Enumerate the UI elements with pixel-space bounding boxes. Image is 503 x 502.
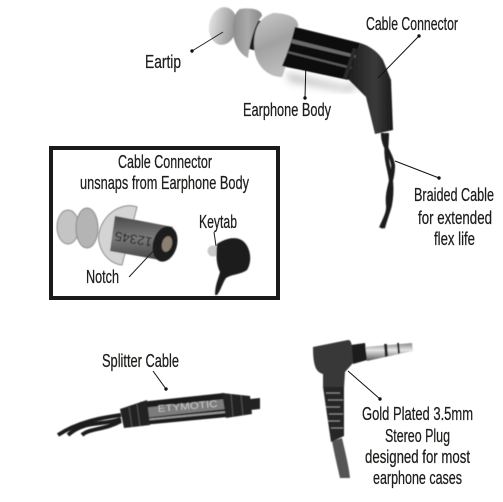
earphone body (282, 27, 360, 80)
leader: eartip (190, 32, 223, 53)
splitter logo: ETYMOTIC (157, 399, 218, 415)
leader: cable connector (378, 34, 421, 78)
eartip and body drawing (57, 206, 181, 265)
label: Eartip: Eartip (145, 51, 181, 72)
panel: cable connector inset (51, 148, 278, 298)
label: gold plated plug: earphone cases (373, 467, 462, 488)
label: Keytab: Keytab (199, 211, 237, 232)
serial number: 12345 (113, 228, 154, 250)
splitter body (140, 393, 227, 425)
leader: earphone body (303, 60, 307, 100)
leader: notch (129, 247, 157, 277)
plug head (313, 340, 353, 388)
label: Cable Connector: Cable Connector (366, 13, 458, 34)
eartip (206, 5, 298, 77)
collar (351, 343, 367, 364)
leader: splitter (153, 371, 168, 391)
leader: braided cable (395, 161, 441, 180)
splitter cable photo (58, 393, 260, 435)
soft shadow (285, 72, 365, 92)
braided cable (381, 133, 393, 228)
cable connector (348, 43, 393, 134)
cable (332, 438, 350, 478)
braided wires (58, 415, 121, 435)
label: gold plated plug: Stereo Plug (385, 425, 450, 446)
inset heading: unsnaps from Earphone Body (80, 172, 250, 193)
label: Splitter Cable: Splitter Cable (102, 350, 179, 371)
label: Braided Cable (414, 184, 494, 249)
prong (365, 343, 413, 361)
collars (120, 400, 150, 428)
label: Braided Cable: flex life (434, 228, 475, 249)
leader: keytab (214, 232, 216, 246)
leader: plug (348, 371, 382, 401)
earphone photo (206, 5, 393, 228)
label: gold plated plug (362, 403, 473, 488)
inset heading (80, 151, 250, 193)
label: Notch: Notch (86, 266, 119, 287)
right wire (250, 398, 260, 410)
inset heading: Cable Connector (118, 151, 212, 172)
plug photo (313, 340, 413, 478)
connector with keytab drawing (208, 238, 250, 295)
strain relief (323, 387, 344, 442)
label: Earphone Body: Earphone Body (243, 99, 332, 120)
